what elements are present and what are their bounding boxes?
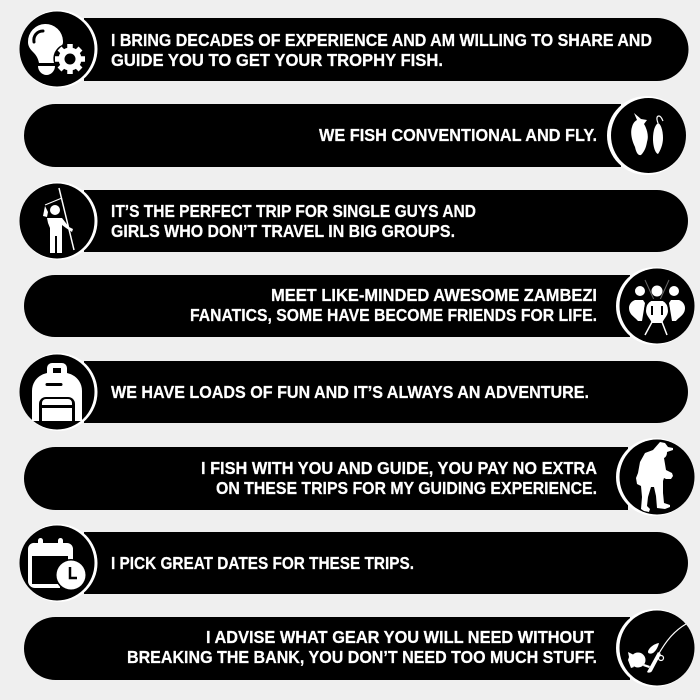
text: IT’S THE PERFECT TRIP FOR SINGLE GUYS AND <box>111 201 476 221</box>
badge circle <box>20 182 98 260</box>
icon: group of three people <box>629 280 685 335</box>
text <box>201 458 597 498</box>
text: WE FISH CONVENTIONAL AND FLY. <box>319 125 597 145</box>
icon: light bulb and gear <box>28 24 86 75</box>
text: GIRLS WHO DON’T TRAVEL IN BIG GROUPS. <box>111 221 455 241</box>
panel: conventional and fly <box>24 96 686 175</box>
bar <box>24 447 628 510</box>
panel: gear advice <box>24 609 695 687</box>
text <box>111 201 476 241</box>
text: FANATICS, SOME HAVE BECOME FRIENDS FOR LIFE. <box>190 305 597 325</box>
text <box>127 627 597 667</box>
badge circle <box>20 10 98 88</box>
panel: no extra guiding cost <box>24 438 695 516</box>
badge circle <box>616 267 694 345</box>
icon: backpack <box>32 363 82 421</box>
text <box>190 285 597 325</box>
badge circle <box>616 438 694 516</box>
bar <box>24 104 621 167</box>
bar <box>84 18 688 81</box>
panel: single travellers <box>20 182 688 260</box>
icon: fishing lures <box>631 113 663 155</box>
panel: great dates <box>20 524 688 602</box>
text: WE HAVE LOADS OF FUN AND IT’S ALWAYS AN ADVENTURE. <box>111 382 589 402</box>
text: GUIDE YOU TO GET YOUR TROPHY FISH. <box>111 50 443 70</box>
text: ON THESE TRIPS FOR MY GUIDING EXPERIENCE. <box>216 478 597 498</box>
bar <box>24 275 630 337</box>
bar <box>84 361 688 423</box>
badge circle <box>616 609 694 687</box>
panel: like-minded fanatics <box>24 267 694 345</box>
badge circle <box>607 96 686 175</box>
icon: angler silhouette <box>636 442 673 512</box>
panel: decades of experience <box>20 10 688 88</box>
text: I BRING DECADES OF EXPERIENCE AND AM WILLING TO SHARE AND <box>111 30 652 50</box>
text: BREAKING THE BANK, YOU DON’T NEED TOO MUCH STUFF. <box>127 647 597 667</box>
text: I PICK GREAT DATES FOR THESE TRIPS. <box>111 553 414 573</box>
text: I ADVISE WHAT GEAR YOU WILL NEED WITHOUT <box>206 627 594 647</box>
badge circle <box>20 353 98 431</box>
icon: rod, reel and lure <box>628 624 686 673</box>
text <box>111 30 652 70</box>
icon: angler with rod <box>43 188 74 253</box>
text: I FISH WITH YOU AND GUIDE, YOU PAY NO EXTRA <box>201 458 597 478</box>
text: MEET LIKE-MINDED AWESOME ZAMBEZI <box>271 285 597 305</box>
bar <box>24 617 630 680</box>
icon: calendar and clock <box>28 538 87 591</box>
bar <box>84 190 688 252</box>
panel: fun and adventure <box>20 353 688 431</box>
bar <box>84 532 688 594</box>
badge circle <box>20 524 98 602</box>
